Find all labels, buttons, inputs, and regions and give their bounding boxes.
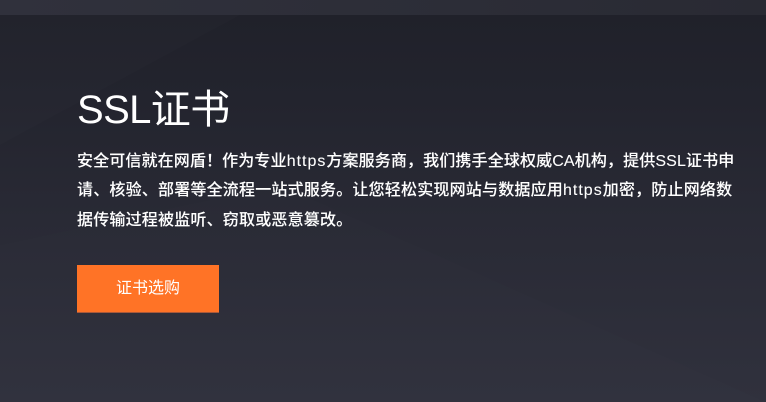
description text: 请、核验、部署等全流程一站式服务。让您轻松实现网站与数据应用https加密，防止网络数 [77,182,732,199]
description text: 安全可信就在网盾！作为专业https方案服务商，我们携手全球权威CA机构，提供SSL证书申 [77,153,734,170]
top strip [0,0,766,15]
description text: 据传输过程被监听、窃取或恶意篡改。 [77,212,352,229]
button: buy certificate [77,265,219,313]
button: buy certificate: 证书选购 [116,280,180,297]
description text [77,152,734,229]
title: SSL证书 [77,88,230,132]
